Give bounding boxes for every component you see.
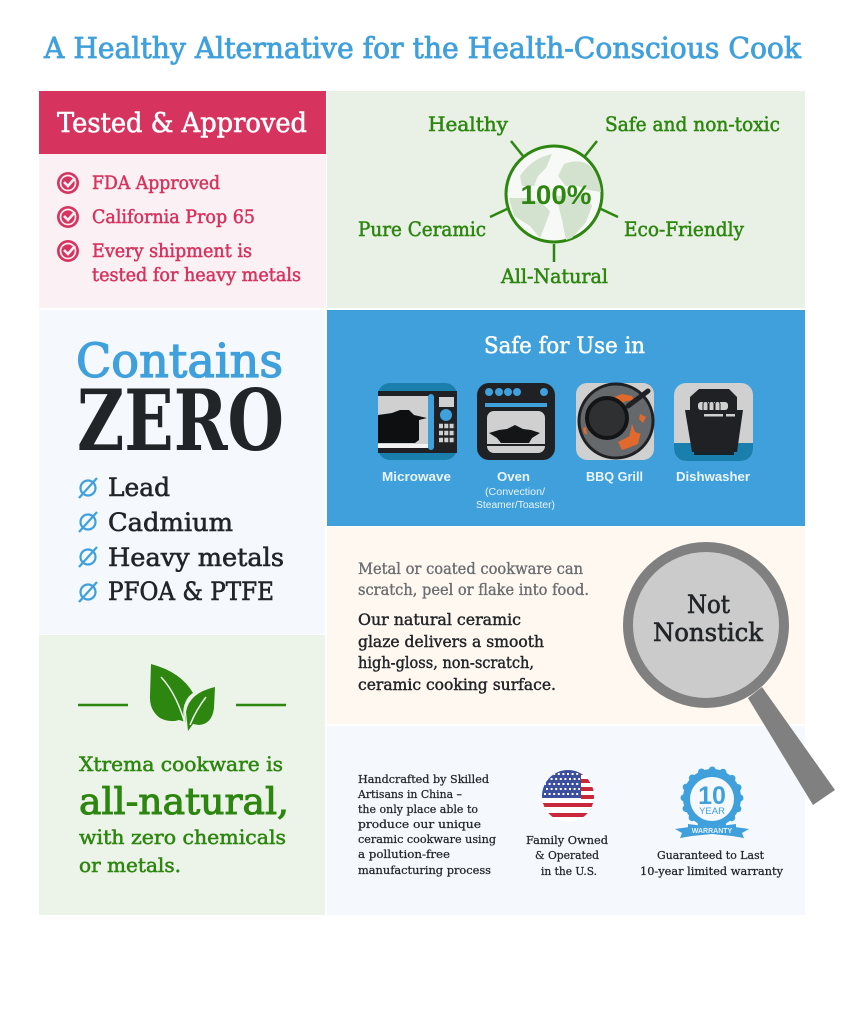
heading: contains: Contains	[76, 334, 283, 389]
icon: warranty badge	[675, 769, 749, 838]
text: all-natural claim: all-natural,	[79, 782, 289, 823]
labels: Pure Ceramic	[358, 217, 486, 241]
list: approvals: tested for heavy metals	[92, 265, 301, 286]
text: all-natural claim: or metals.	[79, 853, 181, 877]
list: excluded substances: Cadmium	[108, 508, 233, 537]
text: all-natural claim: Xtrema cookware is	[79, 752, 283, 776]
labels: (Convection/	[485, 487, 545, 498]
list: excluded substances: Lead	[108, 473, 170, 502]
title: A Healthy Alternative for the Health-Conscious Cook	[43, 31, 801, 65]
rays	[490, 141, 618, 262]
text: handcrafted: the only place able to	[358, 802, 478, 816]
labels: BBQ Grill	[586, 470, 643, 484]
text: guarantee	[640, 848, 783, 878]
icon: warranty badge: YEAR	[699, 806, 725, 817]
text: handcrafted: Artisans in China –	[357, 787, 462, 801]
text: family owned: & Operated	[535, 848, 600, 862]
panel: craftsmanship	[327, 726, 805, 915]
labels: Microwave	[382, 470, 451, 484]
text: family owned: Family Owned	[526, 833, 609, 847]
text: ceramic glaze	[358, 610, 556, 694]
labels: Healthy	[428, 112, 509, 136]
panel: tested and approved	[39, 91, 326, 308]
panel: contains zero	[39, 310, 325, 634]
text: handcrafted: a pollution-free	[358, 847, 450, 861]
heading: safe for use: Safe for Use in	[484, 334, 645, 359]
text: metal cookware: scratch, peel or flake into food.	[358, 581, 589, 599]
text: handcrafted	[357, 772, 497, 877]
text: all-natural claim	[79, 752, 289, 877]
list: excluded substances: PFOA & PTFE	[108, 577, 274, 606]
labels: Steamer/Toaster)	[476, 500, 555, 511]
labels: Eco-Friendly	[624, 217, 745, 241]
icon: us flag	[542, 770, 594, 822]
labels: All-Natural	[500, 264, 608, 288]
text: ceramic glaze: high-gloss, non-scratch,	[358, 653, 534, 672]
text: handcrafted: produce our unique	[358, 817, 481, 831]
list: excluded substances: Heavy metals	[108, 543, 284, 572]
icon: microwave	[378, 383, 457, 460]
text: guarantee: 10-year limited warranty	[640, 864, 783, 878]
heading: tested and approved	[39, 91, 326, 154]
panel: safe for use	[327, 310, 805, 526]
text: all-natural claim: with zero chemicals	[79, 825, 286, 849]
labels: Dishwasher	[676, 470, 750, 484]
labels	[358, 112, 780, 288]
icon: warranty badge: 10	[698, 782, 726, 810]
labels: Safe and non-toxic	[605, 112, 780, 136]
icon: bbq grill	[576, 383, 654, 460]
icon: globe	[506, 146, 602, 242]
list: approvals: California Prop 65	[92, 207, 255, 228]
text: handcrafted: Handcrafted by Skilled	[358, 772, 490, 786]
heading: zero: ZERO	[77, 371, 284, 470]
magnifying glass	[628, 547, 835, 805]
panel: not nonstick	[327, 527, 805, 724]
list: approvals: Every shipment is	[92, 241, 252, 262]
magnifying glass: Nonstick	[653, 618, 764, 647]
text: handcrafted: ceramic cookware using	[358, 832, 497, 846]
list: approvals	[57, 172, 301, 286]
list: approvals: FDA Approved	[92, 173, 220, 194]
text: family owned	[526, 833, 609, 878]
text: family owned: in the U.S.	[541, 864, 597, 878]
magnifying glass: Not	[687, 590, 730, 619]
text: metal cookware	[358, 560, 589, 599]
text: handcrafted: manufacturing process	[358, 863, 491, 877]
panel: all-natural	[39, 635, 325, 915]
icon: globe: 100%	[520, 180, 592, 210]
list: excluded substances	[79, 473, 284, 606]
icon: warranty badge: WARRANTY	[692, 828, 733, 835]
text: ceramic glaze: Our natural ceramic	[358, 610, 521, 629]
icon: leaves	[78, 664, 286, 731]
labels: Oven	[497, 470, 530, 484]
icon: oven	[477, 383, 555, 460]
icon: dishwasher	[674, 383, 753, 461]
heading: tested and approved: Tested & Approved	[57, 108, 307, 139]
text: ceramic glaze: glaze delivers a smooth	[358, 632, 544, 651]
labels	[382, 470, 750, 511]
panel: 100% claims	[327, 91, 805, 308]
text: metal cookware: Metal or coated cookware can	[358, 560, 583, 578]
text: guarantee: Guaranteed to Last	[657, 848, 764, 862]
text: ceramic glaze: ceramic cooking surface.	[358, 675, 556, 694]
